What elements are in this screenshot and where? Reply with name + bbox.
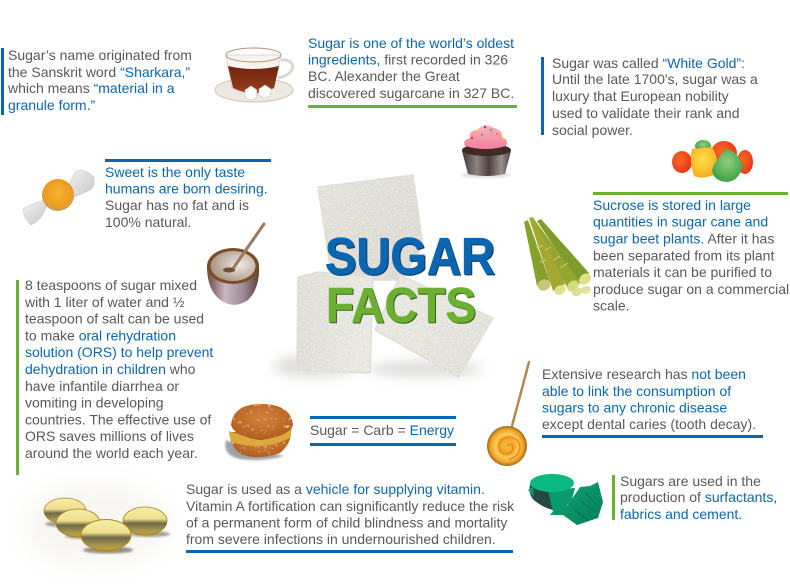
text block: oral rehydration: solution (ORS) to help prevent	[25, 344, 213, 360]
text block: oldest ingredients: discovered sugarcane in 327 BC.	[308, 85, 514, 101]
text block: vitamin vehicle: from severe infections in undernourished children.	[186, 531, 496, 547]
title: FACTS	[326, 279, 476, 333]
icon: lollipop	[487, 362, 529, 466]
text block: carb energy	[310, 416, 456, 446]
title: FACTS	[327, 280, 477, 334]
text block: oldest ingredients: BC. Alexander the Great	[308, 68, 460, 84]
text block: oral rehydration: around the world each year.	[25, 445, 198, 461]
icon: sugared donut	[225, 404, 293, 460]
title: SUGAR	[325, 228, 495, 286]
title	[325, 228, 496, 334]
text block: vitamin vehicle: of a permanent form of child blindness and mortality	[186, 514, 507, 530]
text block: white gold: luxury that European nobility	[552, 88, 729, 104]
text block: surfactants: production of surfactants,	[620, 489, 777, 505]
text block: chronic disease research: Extensive research has not been	[542, 366, 746, 382]
text block: white gold: Until the late 1700's, sugar was a	[552, 71, 758, 87]
text block: oral rehydration: vomiting in developing	[25, 394, 164, 410]
text block: name origin: Sugar’s name originated from	[8, 47, 192, 63]
text block: sucrose: produce sugar on a commercial	[593, 281, 789, 297]
text block: white gold: used to validate their rank and	[552, 105, 740, 121]
text block: sweet taste: Sugar has no fat and is	[105, 197, 249, 213]
text block: oral rehydration	[16, 277, 213, 475]
icon: vitamin capsules	[23, 485, 170, 565]
text block: sucrose: materials it can be purified to	[593, 264, 772, 280]
title: SUGAR	[326, 229, 496, 287]
text block: oral rehydration: ORS saves millions of lives	[25, 428, 194, 444]
text block: chronic disease research: sugars to any chronic disease	[542, 400, 727, 416]
text block: vitamin vehicle	[186, 481, 515, 553]
icon: gummy candies	[672, 140, 753, 182]
text block: surfactants: fabrics and cement.	[620, 506, 742, 522]
text block: sucrose: Sucrose is stored in large	[593, 197, 751, 213]
text block: oldest ingredients	[308, 35, 517, 108]
text block: oldest ingredients: Sugar is one of the world’s oldest	[308, 35, 514, 51]
icon: wrapped candy	[23, 170, 94, 225]
text block: oral rehydration: 8 teaspoons of sugar mixed	[25, 277, 197, 293]
text block: sweet taste: Sweet is the only taste	[105, 164, 245, 180]
text block: oldest ingredients: ingredients, first recorded in 326	[308, 52, 508, 68]
icon: bowl with spoon	[207, 224, 264, 305]
text block: name origin: granule form.”	[8, 97, 95, 113]
text block: name origin: the Sanskrit word “Sharkara,”	[8, 64, 190, 80]
text block: vitamin vehicle: Vitamin A fortification can significantly reduce the risk	[186, 498, 515, 514]
text block: oral rehydration: with 1 liter of water and ½	[24, 294, 185, 310]
text block: sweet taste: 100% natural.	[105, 214, 191, 230]
text block: chronic disease research: able to link the consumption of	[542, 383, 731, 399]
text block: white gold: Sugar was called “White Gold”:	[552, 55, 745, 71]
text block: surfactants	[612, 473, 777, 522]
icon: sugar cane stalks	[524, 217, 593, 298]
text block: sucrose: quantities in sugar cane and	[593, 214, 768, 230]
icon: teacup with sugar cubes	[215, 48, 293, 102]
text block: surfactants: Sugars are used in the	[620, 473, 761, 489]
text block: oral rehydration: teaspoon of salt can be used	[25, 310, 204, 326]
text block: sucrose	[593, 192, 789, 314]
text block: chronic disease research: except dental caries (tooth decay).	[542, 416, 756, 432]
illustration: sugar cubes	[273, 175, 493, 377]
text block: oral rehydration: have infantile diarrhea or	[25, 378, 179, 394]
text block: carb energy: Sugar = Carb = Energy	[310, 422, 454, 438]
text block: oral rehydration: dehydration in children who	[25, 361, 196, 377]
text block: sweet taste: humans are born desiring.	[105, 180, 268, 196]
text block: sucrose: been separated from its plant	[593, 248, 774, 264]
text block: name origin	[1, 47, 192, 115]
text block: white gold	[541, 55, 758, 138]
text block: sucrose: scale.	[593, 298, 630, 314]
text block: oral rehydration: to make oral rehydration	[25, 328, 176, 344]
text block: oral rehydration: countries. The effective use of	[25, 412, 211, 428]
text block: name origin: which means “material in a	[7, 80, 175, 96]
text block: white gold: social power.	[552, 122, 633, 138]
text block: sucrose: sugar beet plants. After it has	[593, 230, 774, 246]
text block: chronic disease research	[542, 366, 763, 438]
icon: cupcake	[461, 125, 511, 178]
text block: sweet taste	[105, 159, 271, 230]
text block: vitamin vehicle: Sugar is used as a vehicle for supplying vitamin.	[186, 481, 485, 497]
icon: green fabric	[528, 474, 603, 525]
